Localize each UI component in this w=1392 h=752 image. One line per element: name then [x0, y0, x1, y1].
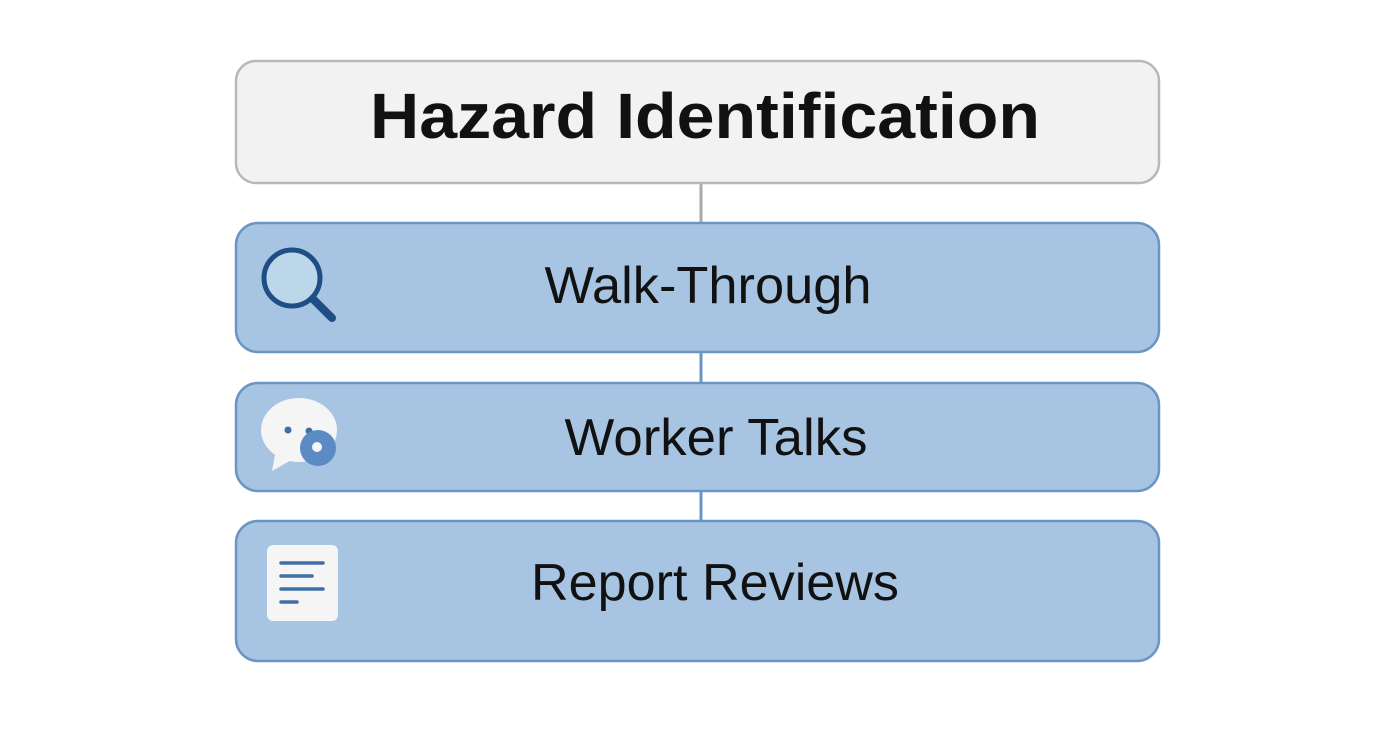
label: walk-through: Walk-Through [544, 257, 872, 315]
panel: walk-through [236, 223, 1159, 352]
title: Hazard Identification [370, 80, 1040, 152]
icon: document [267, 545, 338, 621]
icon: chat bubble [261, 398, 337, 471]
icon: magnifier [264, 250, 332, 318]
title [236, 61, 1159, 183]
label: worker talks: Worker Talks [564, 409, 868, 467]
panel: worker talks [236, 383, 1159, 491]
panel: report reviews [236, 521, 1159, 661]
label: report reviews: Report Reviews [531, 554, 899, 612]
